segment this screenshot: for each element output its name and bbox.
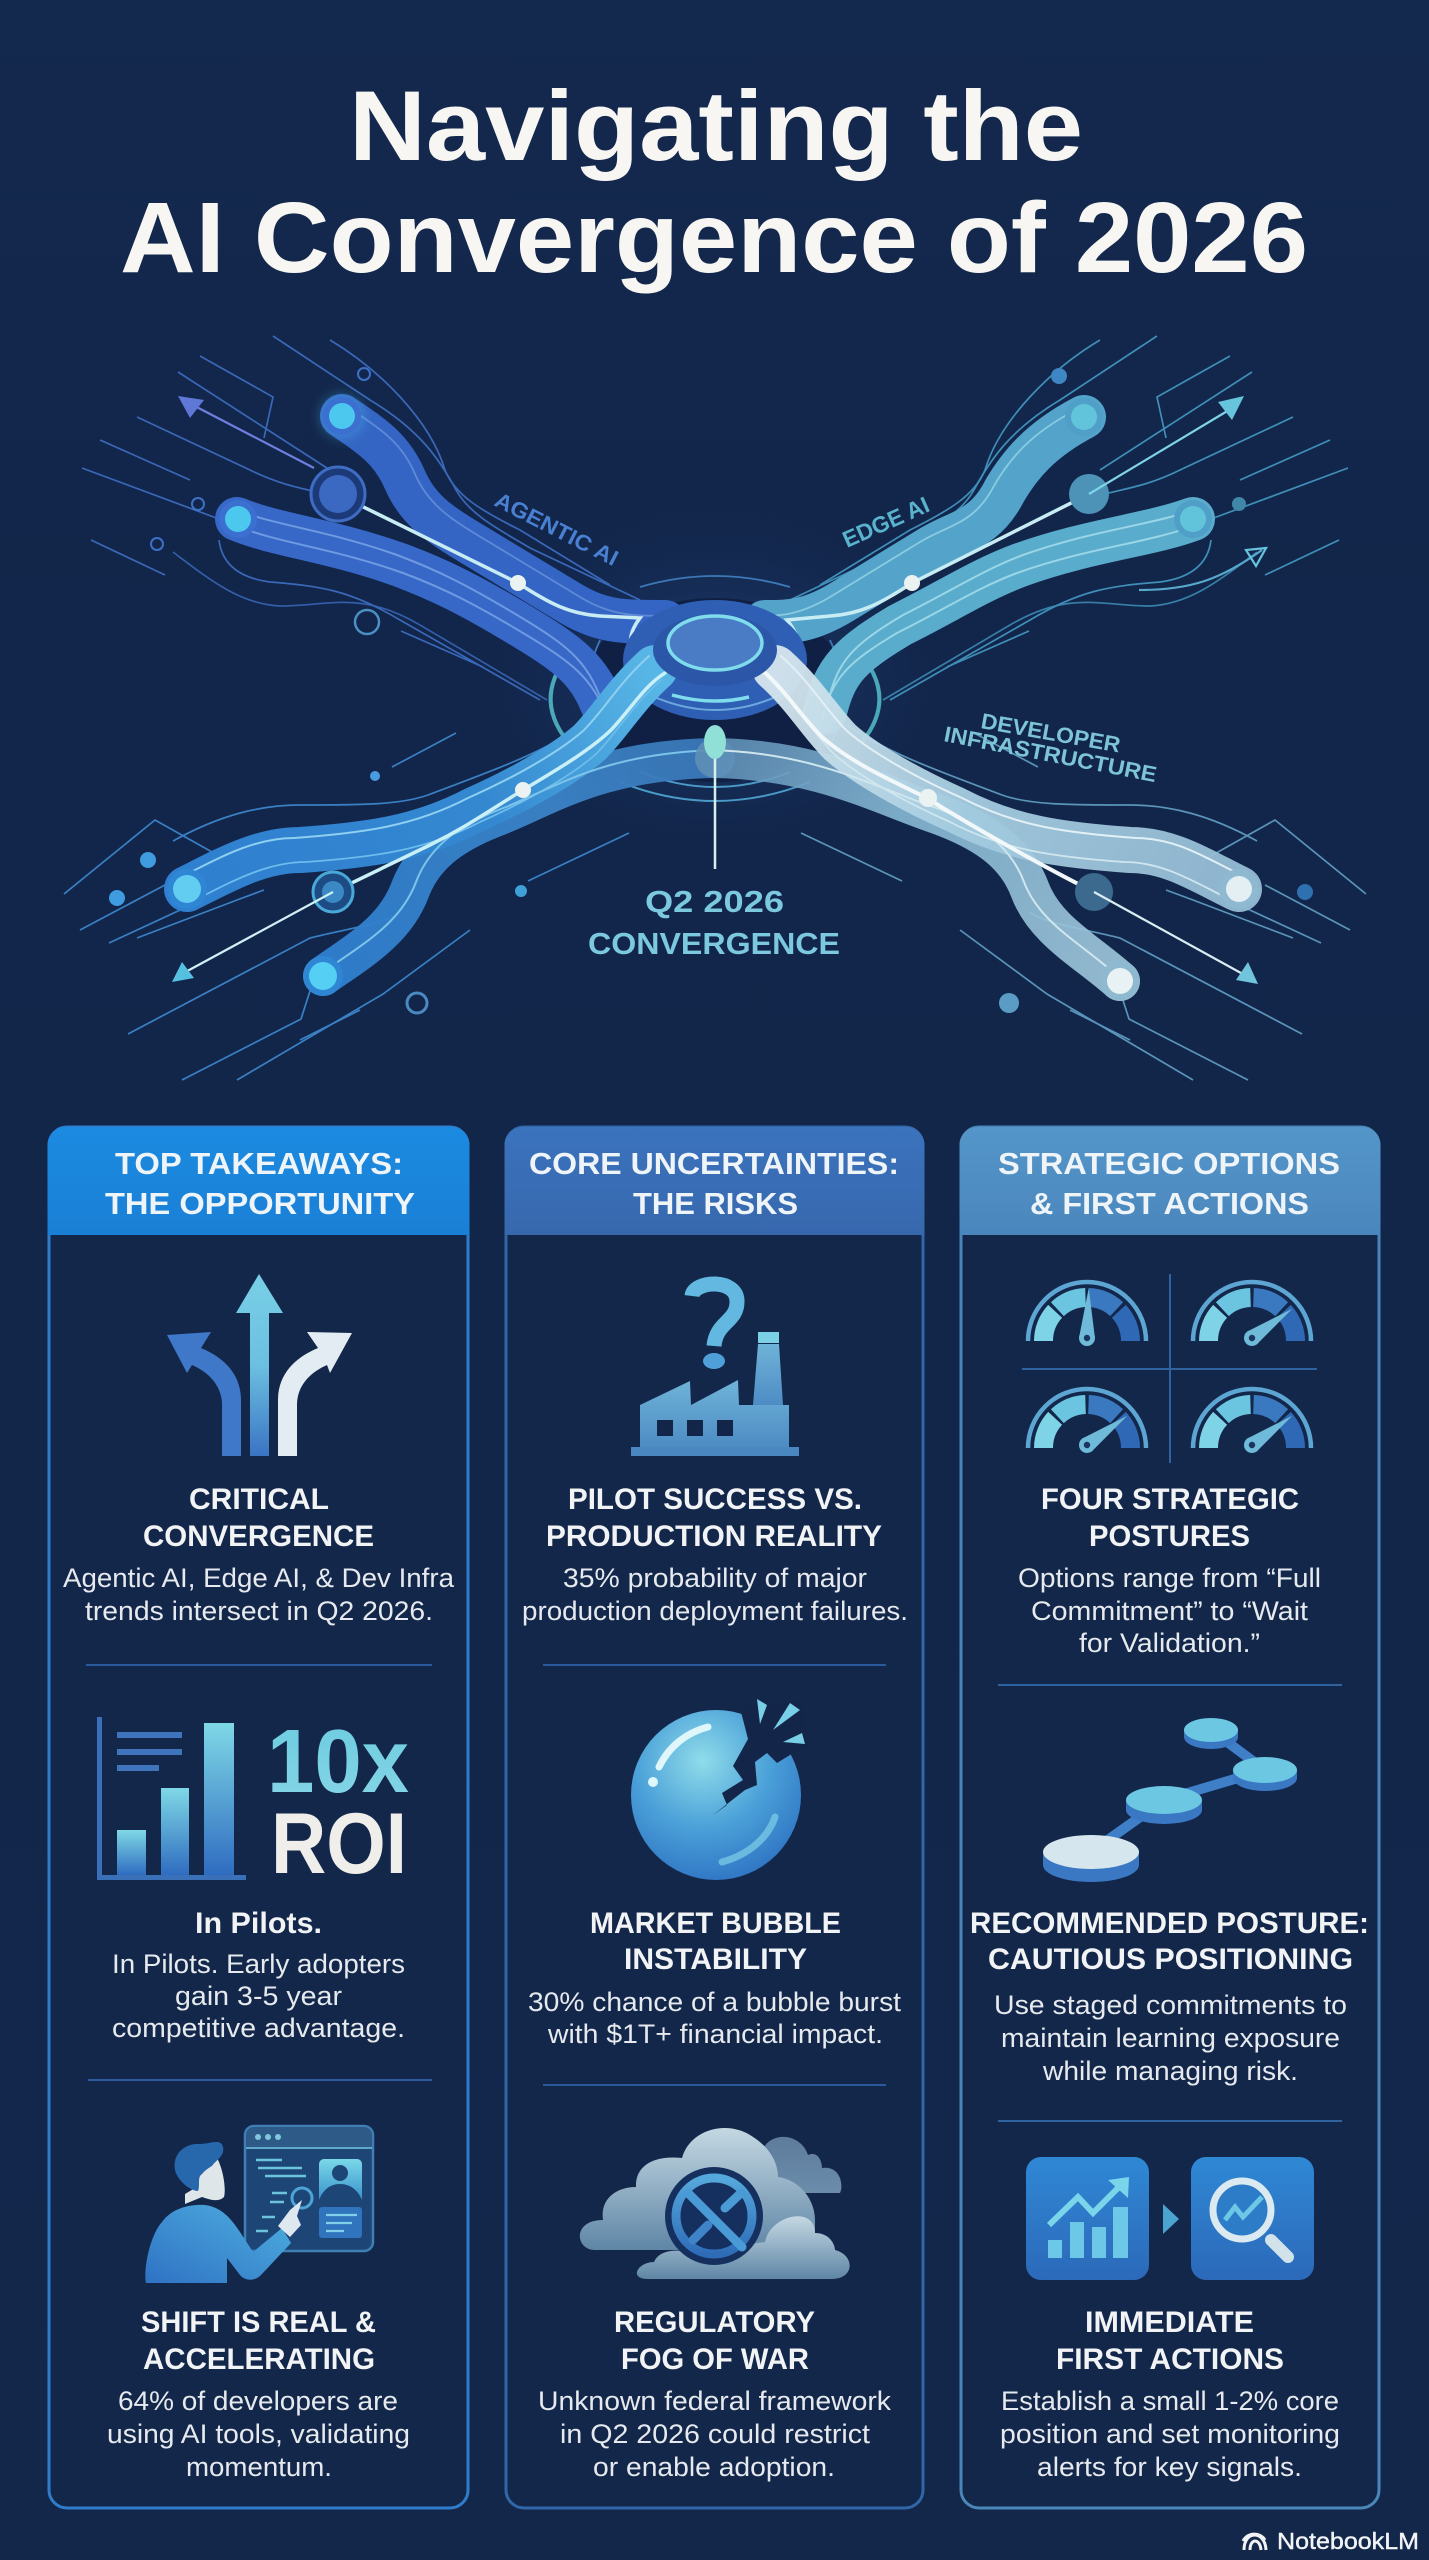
- label: Q2 2026 convergence: CONVERGENCE: [588, 926, 840, 961]
- heading: in pilots: In Pilots.: [195, 1907, 322, 1940]
- heading: four postures: POSTURES: [1089, 1520, 1250, 1553]
- text: recommended posture: maintain learning exposure: [1001, 2023, 1340, 2053]
- panel header: & FIRST ACTIONS: [1030, 1186, 1309, 1221]
- heading: regulatory fog: FOG OF WAR: [621, 2343, 809, 2376]
- title: AI Convergence of 2026: [120, 182, 1308, 294]
- text: critical convergence: trends intersect in Q2 2026.: [85, 1596, 433, 1626]
- icon: cracked bubble: [631, 1699, 810, 1880]
- hub base: [623, 600, 807, 720]
- heading: recommended posture: [970, 1907, 1369, 1976]
- label: Q2 2026 convergence: Q2 2026: [645, 884, 784, 919]
- heading: recommended posture: RECOMMENDED POSTURE:: [970, 1907, 1369, 1940]
- band: lower-left: [181, 656, 721, 976]
- end nodes: [167, 396, 1259, 1001]
- heading: four postures: [1041, 1483, 1299, 1553]
- heading: four postures: FOUR STRATEGIC: [1041, 1483, 1299, 1516]
- gauge 3: [1028, 1389, 1146, 1456]
- panel frame: [506, 1127, 923, 2508]
- heading: recommended posture: CAUTIOUS POSITIONING: [988, 1943, 1353, 1976]
- heading: pilot success: PILOT SUCCESS VS.: [568, 1483, 862, 1516]
- flow markers: [510, 575, 937, 807]
- icon: staged path of discs: [1043, 1718, 1297, 1882]
- text: shift is real: 64% of developers are: [118, 2386, 398, 2416]
- heading: pilot success: [546, 1483, 882, 1553]
- icon: developer at screen: [145, 2126, 373, 2283]
- text: market bubble: 30% chance of a bubble burst: [528, 1987, 902, 2017]
- text: regulatory fog: [538, 2386, 892, 2482]
- panel frame: [49, 1127, 468, 2508]
- circuit lines: [64, 336, 1366, 1080]
- text: pilot success: [522, 1563, 908, 1626]
- heading: regulatory fog: [614, 2306, 815, 2376]
- text: in pilots: In Pilots. Early adopters: [112, 1949, 405, 1979]
- text: immediate first actions: Establish a small 1-2% core: [1001, 2386, 1339, 2416]
- text: regulatory fog: in Q2 2026 could restrict: [560, 2419, 871, 2449]
- text: shift is real: [107, 2386, 410, 2482]
- icon: chart to monitoring: [1026, 2157, 1314, 2280]
- heading: market bubble: INSTABILITY: [624, 1943, 807, 1976]
- text: critical convergence: Agentic AI, Edge AI, & Dev Infra: [63, 1563, 455, 1593]
- text: market bubble: [528, 1987, 902, 2049]
- text: market bubble: with $1T+ financial impact.: [547, 2019, 883, 2049]
- heading: shift is real: ACCELERATING: [143, 2343, 375, 2376]
- icon: factory with question mark: [631, 1284, 799, 1456]
- heading: critical convergence: CRITICAL: [189, 1483, 329, 1516]
- panel header: CORE UNCERTAINTIES:: [529, 1146, 899, 1181]
- band: developer infrastructure: [709, 656, 1245, 981]
- heading: immediate first actions: IMMEDIATE: [1085, 2306, 1254, 2339]
- text: pilot success: production deployment failures.: [522, 1596, 908, 1626]
- panel header: THE RISKS: [633, 1186, 798, 1221]
- text: four postures: Commitment” to “Wait: [1031, 1596, 1309, 1626]
- text: in pilots: [112, 1949, 405, 2043]
- text: in pilots: gain 3-5 year: [175, 1981, 342, 2011]
- text: immediate first actions: [1000, 2386, 1340, 2482]
- NotebookLM logo: NotebookLM: [1277, 2528, 1419, 2554]
- label: developer infrastructure: INFRASTRUCTURE: [942, 721, 1159, 787]
- panel: top takeaways: [48, 1127, 470, 2508]
- text: regulatory fog: Unknown federal framework: [538, 2386, 892, 2416]
- rings around hub: [551, 576, 879, 801]
- text: regulatory fog: or enable adoption.: [593, 2452, 835, 2482]
- text: immediate first actions: alerts for key signals.: [1037, 2452, 1302, 2482]
- gauge 1: [1028, 1282, 1146, 1346]
- heading: immediate first actions: FIRST ACTIONS: [1056, 2343, 1284, 2376]
- panel header: STRATEGIC OPTIONS: [998, 1146, 1340, 1181]
- heading: pilot success: PRODUCTION REALITY: [546, 1520, 882, 1553]
- panel header: THE OPPORTUNITY: [105, 1186, 415, 1221]
- label: Q2 2026 convergence: [588, 884, 840, 961]
- text: immediate first actions: position and set monitoring: [1000, 2419, 1340, 2449]
- heading: market bubble: MARKET BUBBLE: [590, 1907, 841, 1940]
- panel frame: [961, 1127, 1379, 2508]
- heading: critical convergence: [143, 1483, 374, 1553]
- text: four postures: [1018, 1563, 1321, 1658]
- arrows from nodes: [172, 396, 1266, 984]
- panel header: [960, 1127, 1380, 1235]
- text: recommended posture: [994, 1990, 1347, 2086]
- icon: four gauges: [1022, 1274, 1317, 1463]
- label: edge AI: EDGE AI: [838, 491, 933, 553]
- text: four postures: Options range from “Full: [1018, 1563, 1321, 1593]
- text: recommended posture: while managing risk.: [1042, 2056, 1298, 2086]
- small satellite dots: [109, 368, 1313, 1013]
- icon: fog cloud with prohibition sign: [580, 2128, 850, 2279]
- heading: critical convergence: CONVERGENCE: [143, 1520, 374, 1553]
- stat: ROI: ROI: [271, 1796, 407, 1892]
- panel header: TOP TAKEAWAYS:: [115, 1146, 403, 1181]
- stat: 10x: 10x: [267, 1712, 409, 1812]
- text: recommended posture: Use staged commitments to: [994, 1990, 1347, 2020]
- panel header: [48, 1127, 470, 1235]
- panel: core uncertainties: [504, 1127, 924, 2508]
- icon: three diverging arrows: [167, 1274, 352, 1456]
- heading: shift is real: SHIFT IS REAL &: [141, 2306, 376, 2339]
- icon: 10x ROI chart: [97, 1712, 409, 1892]
- central hub disc: [653, 614, 777, 686]
- title: Navigating the: [349, 70, 1083, 181]
- text: shift is real: using AI tools, validating: [107, 2419, 410, 2449]
- heading: immediate first actions: [1056, 2306, 1284, 2376]
- gauge 4: [1193, 1389, 1311, 1456]
- heading: shift is real: [141, 2306, 376, 2376]
- label: agentic AI: AGENTIC AI: [491, 487, 622, 571]
- hero diagram: Q2 2026 convergence of three trends: [64, 336, 1366, 1080]
- gauge 2: [1193, 1282, 1311, 1349]
- panel: strategic options: [960, 1127, 1380, 2508]
- title: [120, 70, 1308, 294]
- heading: market bubble: [590, 1907, 841, 1976]
- band: edge AI: [755, 411, 1196, 720]
- text: four postures: for Validation.”: [1079, 1628, 1260, 1658]
- heading: regulatory fog: REGULATORY: [614, 2306, 815, 2339]
- convergence pointer: [704, 725, 726, 869]
- text: pilot success: 35% probability of major: [563, 1563, 867, 1593]
- band: agentic AI: [234, 410, 675, 720]
- text: in pilots: competitive advantage.: [112, 2013, 405, 2043]
- panel header: [504, 1127, 924, 1235]
- text: shift is real: momentum.: [186, 2452, 332, 2482]
- text: critical convergence: [63, 1563, 455, 1626]
- label: developer infrastructure: DEVELOPER: [979, 708, 1122, 757]
